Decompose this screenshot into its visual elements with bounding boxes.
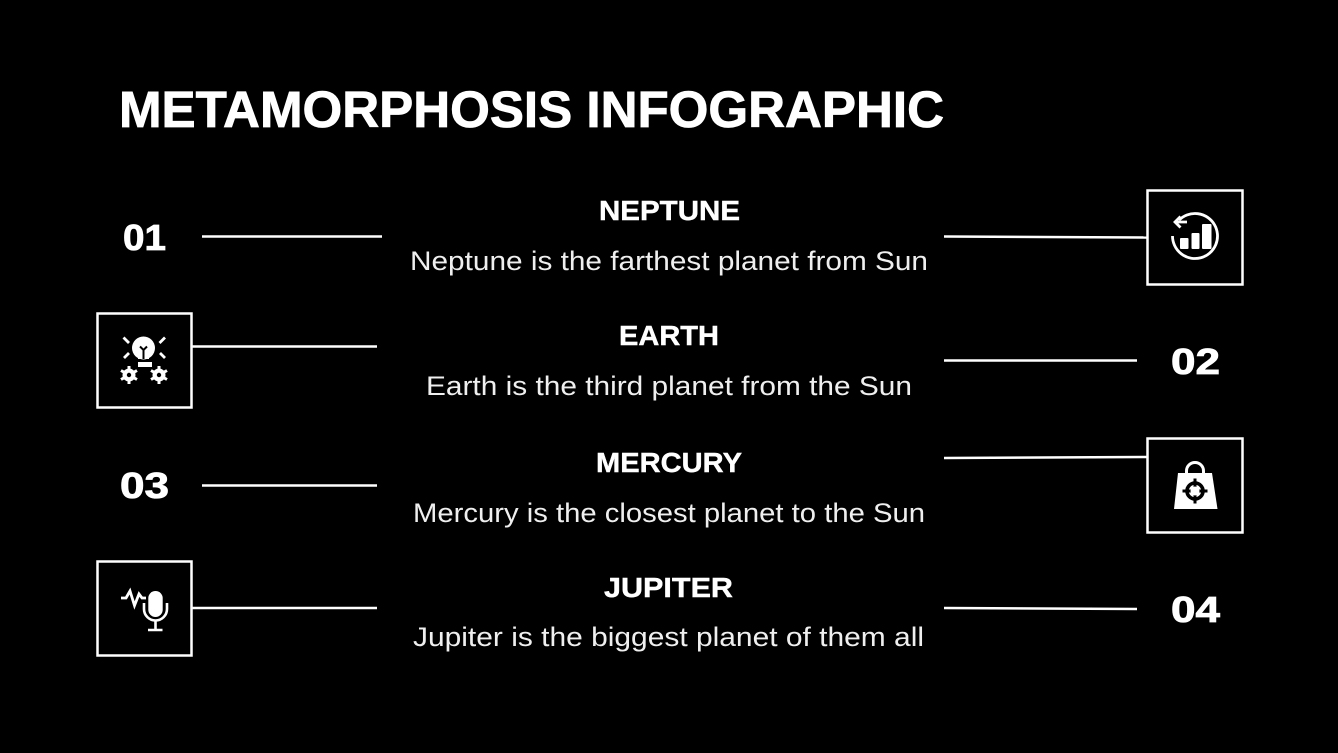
icon: chart with circular arrow xyxy=(1172,214,1218,259)
connector left from icon xyxy=(191,607,377,609)
number 01: 01 xyxy=(123,217,166,258)
icon: bag with target xyxy=(1174,462,1218,509)
number 02: 02 xyxy=(1171,341,1220,382)
icon: mic with pulse xyxy=(121,591,167,630)
heading: Jupiter: JUPITER xyxy=(604,572,733,603)
icon box: light bulb xyxy=(98,314,192,408)
heading: Neptune: NEPTUNE xyxy=(599,195,740,226)
icon box: shopping bag xyxy=(1148,438,1242,532)
heading: Earth: EARTH xyxy=(619,320,719,351)
text: Mercury description: Mercury is the closest planet to the Sun xyxy=(413,498,925,528)
row 2: Earth xyxy=(98,314,1220,408)
text: Neptune description: Neptune is the farthest planet from Sun xyxy=(410,246,928,276)
gear right xyxy=(151,366,167,384)
heading: Mercury: MERCURY xyxy=(596,447,742,478)
icon box: chart refresh xyxy=(1148,190,1242,284)
text: Jupiter description: Jupiter is the biggest planet of them all xyxy=(413,622,924,652)
connector left from icon xyxy=(191,345,377,348)
connector left 03 xyxy=(202,484,377,487)
number 03: 03 xyxy=(120,465,169,506)
connector right to icon xyxy=(944,457,1147,458)
connector left 01 xyxy=(202,235,382,238)
row 3: Mercury xyxy=(120,438,1242,532)
gear left xyxy=(121,366,137,384)
row 1: Neptune xyxy=(123,190,1242,284)
icon: bulb with gears xyxy=(121,336,167,384)
icon box: microphone xyxy=(98,562,192,656)
connector right 04 xyxy=(944,608,1137,609)
connector right to icon xyxy=(944,236,1147,238)
row 4: Jupiter xyxy=(98,562,1220,656)
number 04: 04 xyxy=(1171,589,1220,630)
title: METAMORPHOSIS INFOGRAPHIC xyxy=(119,81,944,138)
connector right 02 xyxy=(944,359,1137,362)
text: Earth description: Earth is the third planet from the Sun xyxy=(426,371,912,401)
